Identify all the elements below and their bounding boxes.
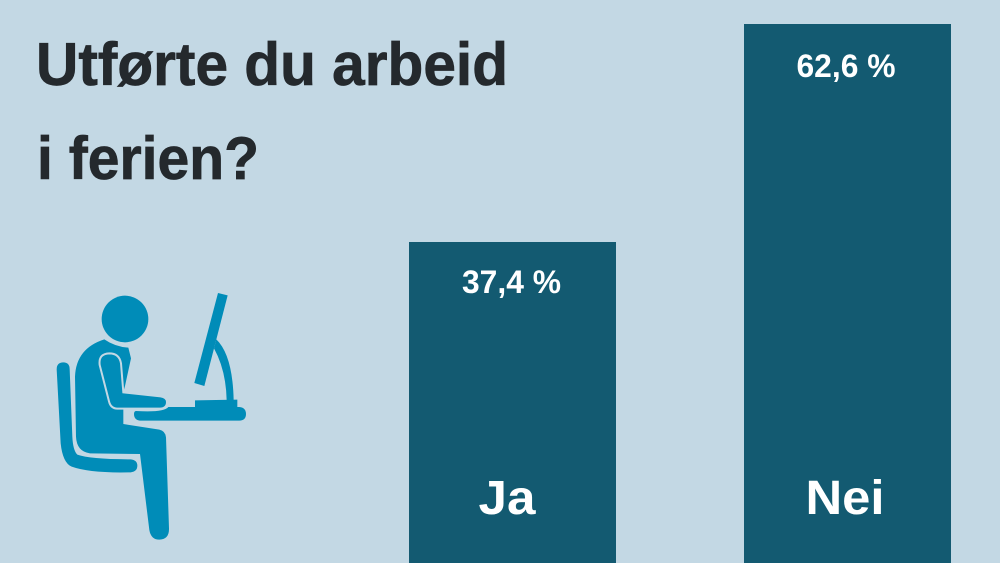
icon: arm (100, 353, 167, 409)
title (36, 31, 508, 192)
icon: desk (134, 400, 246, 421)
bar: Nei (744, 24, 951, 563)
value: Ja: 37,4 % (462, 264, 561, 300)
title: i ferien? (37, 125, 259, 192)
label: Ja: Ja (478, 472, 536, 525)
bar: Ja (409, 242, 616, 563)
icon: monitor (194, 293, 228, 386)
icon: monitor stand (214, 339, 234, 400)
value: Nei: 62,6 % (796, 48, 896, 84)
icon: chair (57, 362, 137, 472)
label: Nei: Nei (806, 472, 884, 525)
icon: head (102, 296, 148, 342)
title: Utførte du arbeid (36, 31, 508, 98)
icon: person working at computer (57, 293, 246, 540)
icon: torso and leg (75, 339, 169, 540)
